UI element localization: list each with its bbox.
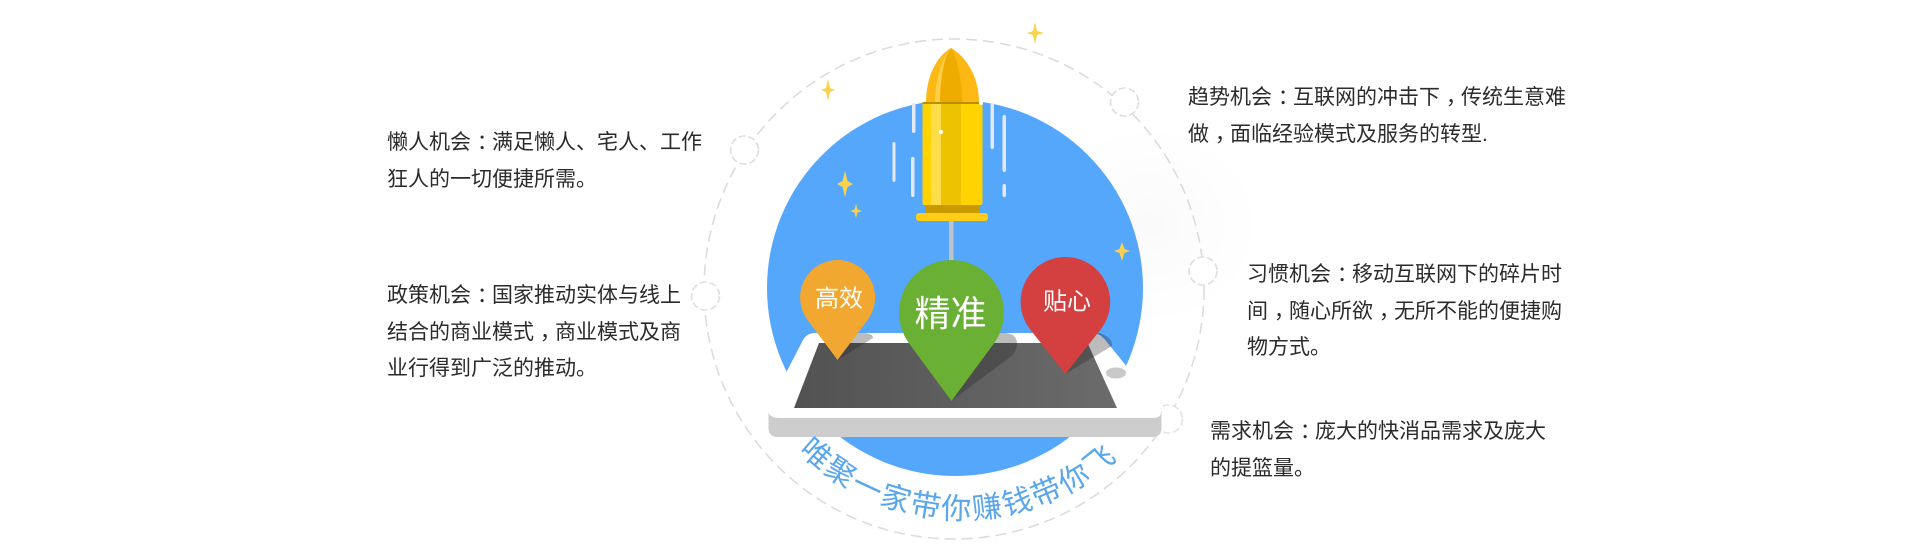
pin: 贴心 [1021, 257, 1110, 374]
orbit node: right [1189, 257, 1217, 285]
speed lines [892, 103, 1006, 197]
pin shadows [825, 333, 1112, 401]
text block: 政策机会: 政策机会 ：国家推动实体与线上 [387, 284, 681, 307]
text block: 懒人机会: 懒人机会 ：满足懒人、宅人、工作 [387, 131, 702, 154]
pin: 贴心: 贴心 [1043, 288, 1091, 316]
text block: 懒人机会: 狂人的一切便捷所需。 [387, 168, 597, 191]
tablet side [768, 412, 1162, 437]
text block: 趋势机会: 做 ，面临经验模式及服务的转型. [1188, 123, 1488, 146]
tablet [768, 333, 1162, 437]
text block: 需求机会: 的提篮量。 [1210, 457, 1315, 480]
pin: 高效: 高效 [815, 286, 863, 312]
text block: 趋势机会: 趋势机会 ：互联网的冲击下 ，传统生意难 [1188, 86, 1566, 109]
tablet button [1106, 368, 1126, 378]
text block: 需求机会: 需求机会 ：庞大的快消品需求及庞大 [1210, 420, 1546, 443]
orbit node: upper left [730, 136, 758, 164]
pin: 高效 [800, 260, 875, 360]
text block: 习惯机会: 习惯机会 ：移动互联网下的碎片时 [1247, 263, 1562, 286]
tablet screen [794, 343, 1117, 408]
text block: 趋势机会 [1188, 86, 1566, 146]
text block: 习惯机会: 间 ，随心所欲 ，无所不能的便捷购 [1247, 300, 1562, 323]
dashed orbit ring [692, 39, 1217, 539]
text block: 政策机会 [387, 284, 681, 380]
text block: 政策机会: 业行得到广泛的推动。 [387, 357, 597, 380]
text block: 习惯机会 [1247, 263, 1562, 359]
orbit node: lower right [1154, 405, 1182, 433]
pin: 精准 [899, 260, 1004, 401]
icon: bullet rocket [916, 48, 988, 262]
sparkles [821, 22, 1130, 261]
text block: 懒人机会 [387, 130, 702, 191]
tablet top face [768, 333, 1161, 418]
text block: 需求机会 [1210, 420, 1546, 480]
text block: 习惯机会: 物方式。 [1247, 336, 1331, 359]
orbit node: left [692, 282, 720, 310]
blue disc [767, 100, 1143, 476]
text block: 政策机会: 结合的商业模式 ，商业模式及商 [387, 321, 681, 344]
orbit node: upper right [1110, 88, 1138, 116]
curved slogan: 唯聚一家带你赚钱带你飞 [801, 436, 1116, 522]
pin: 精准: 精准 [914, 293, 987, 334]
